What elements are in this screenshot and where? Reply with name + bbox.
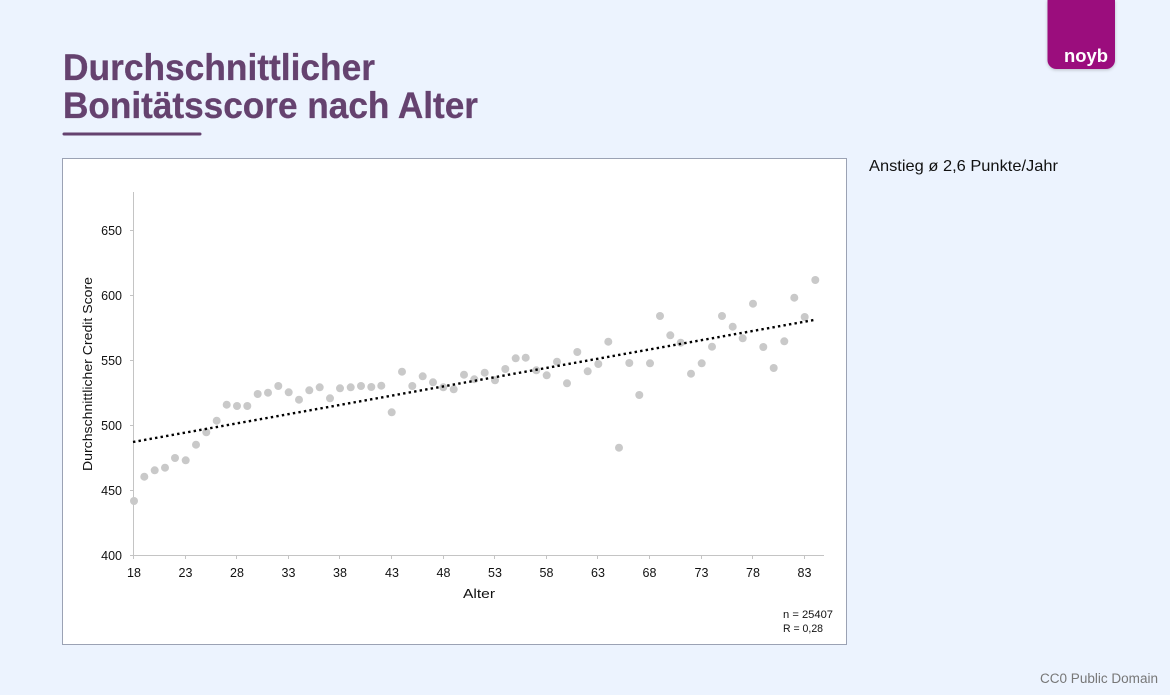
x axis labels: 43	[385, 566, 399, 580]
license note: CC0 Public Domain	[1040, 671, 1158, 686]
x axis labels: 68	[643, 566, 656, 580]
y axis labels	[101, 224, 122, 563]
x axis labels: 63	[591, 566, 605, 580]
x axis labels: 48	[437, 566, 450, 580]
scatter points	[130, 276, 819, 505]
x axis labels: 18	[127, 566, 141, 580]
y axis labels: 600	[101, 289, 122, 303]
x axis labels	[127, 566, 811, 580]
y axis labels: 400	[101, 549, 122, 563]
trend line	[133, 320, 814, 442]
x axis labels: 73	[695, 566, 708, 580]
y axis labels: 650	[101, 224, 122, 238]
x axis labels: 23	[179, 566, 192, 580]
sample stats: n = 25407	[783, 609, 833, 621]
x axis labels: 33	[282, 566, 295, 580]
y axis labels: 500	[101, 419, 122, 433]
x axis labels: 58	[540, 566, 553, 580]
title: Bonitätsscore nach Alter	[63, 85, 478, 126]
y axis labels: 550	[101, 354, 122, 368]
x axis labels: 78	[746, 566, 760, 580]
logo: noyb tab: noyb	[1064, 46, 1108, 66]
annotation: slope: Anstieg ø 2,6 Punkte/Jahr	[869, 158, 1059, 175]
x axis title: Alter	[463, 586, 496, 601]
x axis labels: 53	[488, 566, 502, 580]
title: Durchschnittlicher	[63, 47, 375, 88]
panel: scatter chart	[62, 158, 846, 644]
axes	[130, 192, 824, 559]
sample stats: R = 0,28	[783, 623, 823, 635]
sample stats	[783, 609, 833, 635]
logo: noyb tab	[1048, 0, 1115, 69]
x axis labels: 28	[230, 566, 244, 580]
y axis labels: 450	[101, 484, 122, 498]
x axis labels: 38	[333, 566, 347, 580]
title underline	[62, 132, 202, 136]
y axis title: Durchschnittlicher Credit Score	[80, 277, 95, 471]
x axis labels: 83	[798, 566, 811, 580]
title	[63, 47, 478, 126]
